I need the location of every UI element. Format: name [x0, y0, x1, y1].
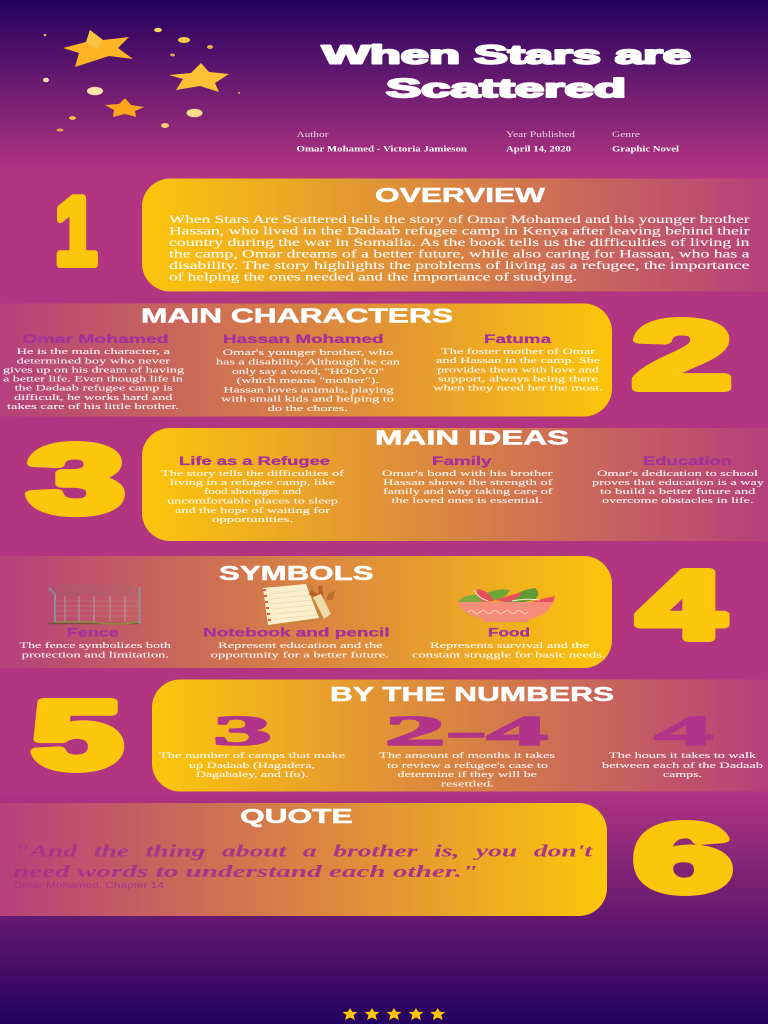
book details: Graphic Novel — [612, 144, 680, 154]
overview text — [169, 214, 750, 284]
idea: family: the loved ones is essential. — [392, 495, 542, 505]
character: Hassan Mohamed: has a disability. Although he can — [216, 356, 401, 366]
idea: family: Hassan shows the strength of — [383, 477, 553, 487]
heading: main characters: MAIN CHARACTERS — [141, 306, 453, 328]
character: Fatuma: Fatuma — [484, 332, 551, 346]
stat: 2-4 months — [379, 709, 556, 788]
panel: main characters — [0, 304, 612, 417]
stat: 4 hours: between each of the Dadaab — [602, 760, 764, 770]
numeral 2: 2 — [633, 302, 731, 409]
stat: 2-4 months: The amount of months it takes — [379, 750, 556, 760]
character: Hassan Mohamed: (which means "mother"). — [236, 375, 379, 385]
notebook label: Notebook and pencil — [203, 626, 390, 640]
fence label: protection and limitation. — [22, 650, 169, 660]
food label: constant struggle for basic needs. — [412, 650, 606, 660]
idea: family: Omar's bond with his brother — [382, 468, 553, 478]
idea: life as a refugee: uncomfortable places to sleep — [167, 496, 339, 506]
title: When Stars are — [322, 40, 691, 70]
heading: main ideas: MAIN IDEAS — [375, 428, 569, 450]
idea: education: proves that education is a way — [592, 477, 765, 487]
numeral 1: 1 — [55, 178, 97, 285]
numeral 3: 3 — [28, 426, 124, 533]
overview text: country during the war in Somalia. As the book tells us the difficulties of living in — [169, 237, 750, 249]
idea: education: Education — [643, 454, 732, 468]
character: Hassan Mohamed: do the chores. — [268, 403, 348, 413]
overview text: of helping the ones needed and the importance of studying. — [169, 272, 577, 284]
character: Fatuma — [433, 332, 603, 392]
character: Omar Mohamed: a better life. Even though life in — [3, 374, 184, 384]
stat: 3 camps: 3 — [213, 709, 272, 755]
book details: Genre — [612, 130, 641, 139]
idea: life as a refugee — [161, 454, 344, 524]
idea: family: family and why taking care of — [383, 486, 553, 496]
book details: April 14, 2020 — [506, 144, 571, 154]
illustration: scattered stars — [43, 28, 240, 131]
character: Hassan Mohamed: Omar's younger brother, who — [223, 347, 394, 357]
character: Fatuma: when they need her the most. — [433, 382, 603, 392]
food label: Food — [488, 626, 530, 640]
idea: education: overcome obstacles in life. — [602, 495, 754, 505]
heading: by the numbers: BY THE NUMBERS — [330, 684, 614, 706]
icon: food bowl — [457, 588, 555, 622]
panel: symbols — [0, 556, 612, 668]
panel: main ideas — [142, 428, 768, 541]
numeral 6: 6 — [634, 805, 732, 912]
title — [322, 40, 691, 103]
book details: Omar Mohamed - Victoria Jamieson — [296, 144, 468, 154]
character: Hassan Mohamed: with small kids and helping to — [221, 394, 395, 404]
quote text: need words to understand each other." — [13, 862, 478, 881]
book details: Author — [296, 130, 329, 139]
character: Omar Mohamed: gives up on his dream of having — [3, 364, 185, 374]
stat: 3 camps — [159, 709, 345, 779]
stat: 4 hours: 4 — [654, 709, 714, 755]
quote attribution: Omar Mohamed, Chapter 14 — [13, 880, 164, 890]
overview text: disability. The story highlights the problems of living as a refugee, the importance — [169, 260, 750, 272]
overview text: the camp, Omar dreams of a better future, while also caring for Hassan, who has a — [169, 248, 750, 260]
heading: quote: QUOTE — [240, 806, 353, 828]
fence label: The fence symbolizes both — [19, 640, 172, 650]
idea: family — [382, 454, 553, 505]
food label: Represents survival and the — [430, 640, 589, 650]
idea: life as a refugee: The story tells the difficulties of — [161, 468, 344, 478]
idea: life as a refugee: opportunities. — [212, 514, 293, 524]
fence label: Fence — [67, 626, 119, 640]
stat: 3 camps: The number of camps that make — [159, 750, 345, 760]
character: Omar Mohamed: takes care of his little brother. — [7, 401, 179, 411]
idea: life as a refugee: Life as a Refugee — [179, 454, 330, 468]
overview text: When Stars Are Scattered tells the story of Omar Mohamed and his younger brother — [169, 214, 750, 226]
book details: Year Published — [506, 130, 575, 139]
idea: family: Family — [432, 454, 492, 468]
character: Hassan Mohamed: Hassan Mohamed — [223, 332, 384, 346]
character: Hassan Mohamed: Hassan loves animals, playing — [223, 384, 394, 394]
quote text — [13, 842, 594, 881]
character: Omar Mohamed: determined boy who never — [17, 356, 170, 366]
character: Fatuma: support, always being there — [438, 374, 598, 384]
quote text: "And the thing about a brother is, you don't — [15, 842, 594, 860]
numeral 5: 5 — [32, 682, 122, 789]
character: Fatuma: provides them with love and — [437, 364, 600, 374]
heading: overview: OVERVIEW — [375, 185, 545, 207]
rating stars — [342, 1008, 445, 1020]
idea: education: to build a better future and — [600, 486, 756, 496]
notebook label: Represent education and the — [218, 640, 383, 650]
character: Fatuma: The foster mother of Omar — [441, 346, 595, 356]
idea: life as a refugee: food shortages and — [204, 486, 302, 496]
stat: 2-4 months: resettled. — [441, 778, 494, 788]
stat: 4 hours: camps. — [663, 769, 702, 779]
character: Omar Mohamed — [3, 332, 185, 411]
stat: 2-4 months: to review a refugee's case to — [387, 760, 549, 770]
stat: 4 hours — [602, 709, 764, 779]
notebook label: opportunity for a better future. — [211, 650, 389, 660]
icon: barbed wire fence — [48, 586, 140, 624]
numeral 4: 4 — [638, 552, 724, 659]
character: Fatuma: and Hassan in the camp. She — [436, 355, 600, 365]
idea: life as a refugee: living in a refugee camp, like — [170, 477, 335, 487]
panel: overview — [142, 178, 768, 292]
title: Scattered — [386, 73, 626, 103]
idea: education: Omar's dedication to school — [597, 468, 759, 478]
character: Omar Mohamed: He is the main character, a — [17, 346, 170, 356]
stat: 3 camps: Dagahaley, and Ifo). — [196, 769, 308, 779]
character: Omar Mohamed: the Dadaab refugee camp is — [15, 382, 174, 392]
stat: 2-4 months: determine if they will be — [398, 769, 537, 779]
book details — [296, 130, 680, 154]
overview text: Hassan, who lived in the Dadaab refugee camp in Kenya after leaving behind their — [169, 226, 750, 238]
heading: symbols: SYMBOLS — [219, 563, 374, 585]
panel: by the numbers — [152, 680, 768, 792]
icon: notebook and pencil — [263, 584, 335, 627]
idea: life as a refugee: and the hope of waiting for — [175, 505, 330, 515]
character: Hassan Mohamed — [216, 332, 401, 413]
stat: 3 camps: up Dadaab (Hagadera, — [189, 760, 315, 770]
character: Omar Mohamed: difficult, he works hard and — [14, 392, 173, 402]
idea: education — [592, 454, 765, 505]
notebook label — [203, 626, 390, 660]
fence label — [19, 626, 172, 660]
stat: 4 hours: The hours it takes to walk — [609, 750, 757, 760]
food label — [412, 626, 606, 660]
stat: 2-4 months: 2-4 — [384, 709, 548, 755]
character: Hassan Mohamed: only say a word, "HOOYO" — [232, 366, 385, 376]
character: Omar Mohamed: Omar Mohamed — [22, 332, 168, 346]
panel: quote — [0, 803, 607, 916]
